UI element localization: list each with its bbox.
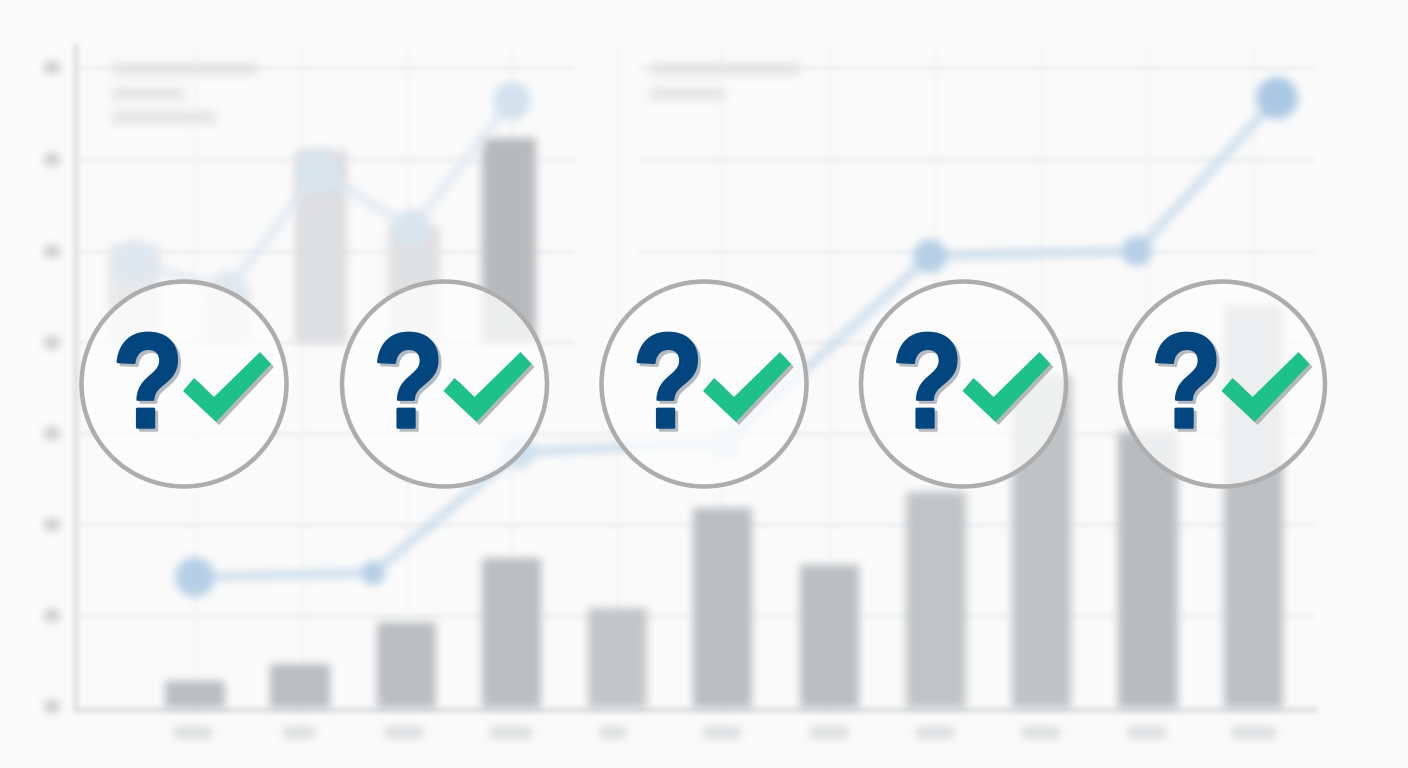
lower bar series	[165, 305, 1283, 708]
badge 5: question mark and check	[1120, 282, 1325, 486]
x-axis tick labels	[174, 727, 1276, 738]
blurred legend: left chart	[112, 63, 258, 124]
badge 3: question mark and check	[602, 282, 806, 486]
upper line series	[112, 82, 531, 309]
badge 1: question mark and check	[82, 282, 286, 486]
chart axes	[76, 44, 1318, 710]
lower line series	[175, 77, 1298, 597]
chart grid	[78, 50, 1315, 708]
blurred legend: right chart	[650, 63, 800, 100]
y-axis tick labels	[45, 62, 59, 712]
badge 4: question mark and check	[861, 282, 1066, 486]
badge 2: question mark and check	[342, 282, 547, 486]
upper bar series	[109, 138, 536, 343]
